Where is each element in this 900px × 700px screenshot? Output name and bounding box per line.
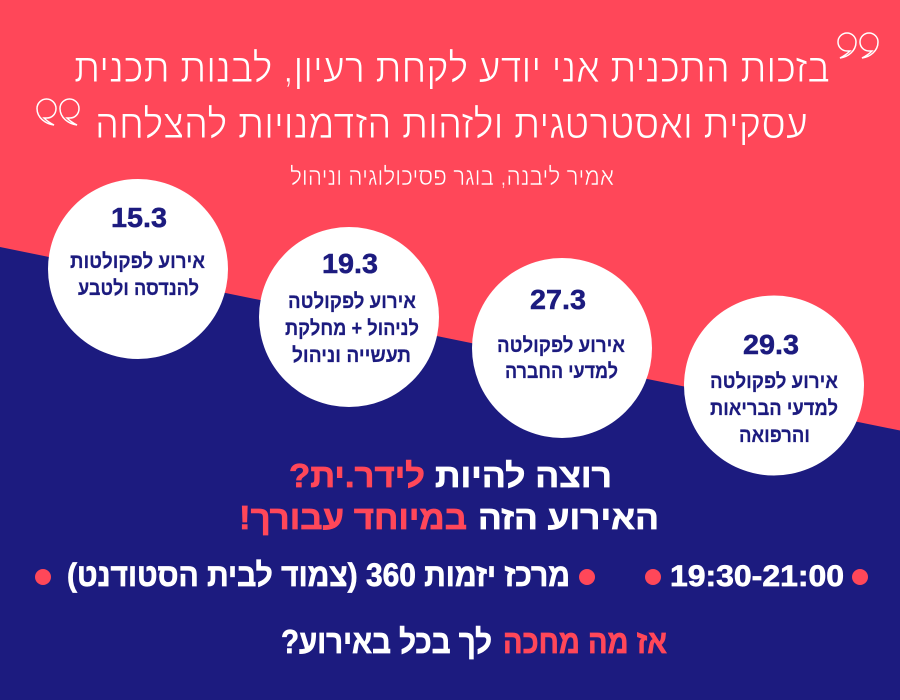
event circle: 15.3: אירוע לפקולטות: [70, 250, 205, 273]
event circle: 19.3: לניהול + מחלקת: [285, 317, 419, 340]
event circle: 27.3: [472, 258, 652, 438]
closing question: אז מה מחכה: [503, 623, 667, 660]
event circle: 15.3: [48, 179, 228, 359]
details row: time and location: 19:30-21:00: [670, 560, 844, 593]
event circle: 27.3: 27.3: [530, 284, 586, 315]
attribution: אמיר ליבנה, בוגר פסיכולוגיה וניהול: [290, 163, 614, 191]
quote text: בזכות התכנית אני יודע לקחת רעיון, לבנות תכנית: [74, 45, 830, 91]
event circle: 27.3: למדעי החברה: [505, 360, 618, 383]
event circle: 29.3: [684, 296, 864, 476]
headline: לידר.ית?: [289, 457, 425, 494]
event circle: 29.3: אירוע לפקולטה: [710, 370, 838, 393]
details row: time and location: [35, 557, 868, 593]
closing question: לך בכל באירוע?: [281, 623, 492, 660]
headline: [239, 457, 659, 536]
navy diagonal panel: [0, 247, 900, 700]
headline: רוצה להיות: [435, 457, 612, 494]
event circle: 19.3: [259, 227, 439, 407]
headline: האירוע הזה: [478, 499, 659, 536]
quote text: עסקית ואסטרטגית ולזהות הזדמנויות להצלחה: [95, 101, 808, 147]
event circle: 15.3: להנדסה ולטבע: [78, 277, 199, 300]
quote text: [74, 45, 830, 147]
event circle: 29.3: למדעי הבריאות: [710, 397, 838, 420]
details row: time and location: מרכז יזמות 360 (צמוד לבית הסטודנט): [67, 557, 570, 593]
icon: closing quote marks: [838, 33, 878, 58]
event circle: 19.3: תעשייה וניהול: [292, 344, 411, 367]
event circle: 15.3: 15.3: [111, 202, 167, 233]
event circle: 29.3: 29.3: [743, 329, 799, 360]
event circle: 29.3: והרפואה: [739, 424, 810, 447]
event circle: 19.3: 19.3: [322, 248, 378, 279]
icon: opening quote marks: [37, 99, 79, 125]
closing question: [281, 623, 667, 660]
headline: במיוחד עבורך!: [239, 499, 467, 536]
event circle: 19.3: אירוע לפקולטה: [288, 290, 416, 313]
event circle: 27.3: אירוע לפקולטה: [497, 334, 625, 357]
